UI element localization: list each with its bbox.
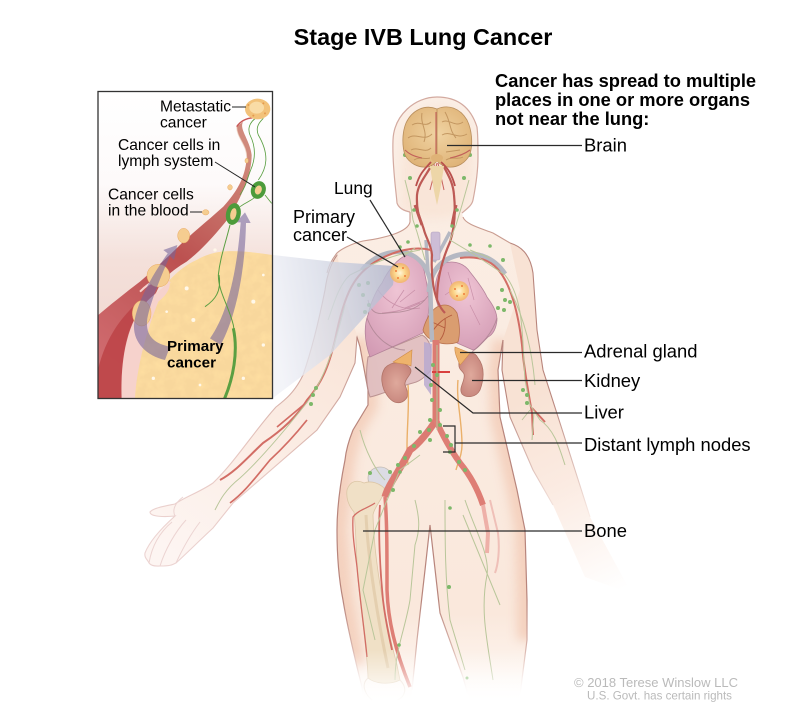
body labels: Bone (584, 520, 627, 541)
ureters (407, 380, 462, 470)
body labels (293, 134, 751, 541)
inset border (98, 92, 272, 398)
inset: lymph nodes (226, 181, 266, 225)
figure: left arm and hand (145, 248, 370, 566)
body labels: Kidney (584, 370, 641, 391)
inset: blood vessel (98, 118, 253, 400)
figure: head, torso and legs (327, 97, 527, 706)
human figure (145, 97, 632, 711)
figure: right arm (495, 238, 632, 594)
inset: labels: Cancer cells in (118, 137, 220, 154)
copyright: U.S. Govt. has certain rights (587, 690, 732, 702)
body labels: Primary (293, 207, 355, 227)
figure: right arm outline (502, 243, 590, 517)
callout: spread description: Cancer has spread to multiple (495, 70, 756, 91)
inset: labels: lymph system (118, 153, 213, 170)
callout: spread description (495, 70, 756, 129)
organ: liver (367, 335, 431, 397)
inset: cancer cells in vessel (132, 158, 248, 326)
vessels: arteries (220, 163, 545, 687)
inset panel: spread through blood and lymph (98, 92, 272, 400)
callout: spread description: places in one or more organs (495, 89, 750, 110)
organ: right kidney (459, 353, 483, 397)
inset: purple arrows (134, 212, 251, 360)
leader lines (347, 146, 582, 531)
inset: labels: cancer (167, 354, 216, 372)
organ: brain (403, 107, 472, 205)
inset: metastatic cancer (245, 99, 270, 119)
body labels: Adrenal gland (584, 340, 698, 362)
inset: labels: Metastatic (160, 98, 231, 116)
lymph vessels and nodes (215, 153, 565, 680)
copyright: © 2018 Terese Winslow LLC (574, 675, 738, 690)
vessel: central grey veins (362, 232, 505, 342)
copyright (574, 675, 738, 702)
bone: femur and hip (347, 467, 405, 700)
title: Stage IVB Lung Cancer (294, 24, 552, 50)
inset: lymph vessels (205, 117, 272, 400)
body labels: Brain (584, 134, 627, 156)
organ: adrenal glands (393, 347, 470, 366)
callout: spread description: not near the lung: (495, 108, 649, 129)
lung: pleura arcs (367, 296, 497, 352)
magnification funnel (273, 255, 395, 398)
organ: heart (423, 305, 459, 344)
organ: left kidney (382, 363, 411, 403)
body labels: Lung (334, 178, 373, 198)
vessels: trachea (431, 232, 440, 260)
inferior vena cava region (424, 342, 432, 395)
inset: labels: cancer (160, 114, 207, 132)
tumor: metastatic cancer in other lung (449, 281, 469, 301)
inset: labels: in the blood (108, 202, 189, 220)
body labels: Liver (584, 402, 624, 422)
inset: labels: Cancer cells (108, 186, 194, 204)
inset: leader lines (190, 107, 255, 212)
inset: tumor mass (134, 248, 272, 400)
body labels: Distant lymph nodes (584, 434, 751, 455)
inset: labels: Primary (167, 338, 224, 355)
body labels: cancer (293, 225, 347, 245)
organ: right-side lung (435, 262, 497, 350)
organ: left-side lung (365, 255, 429, 357)
leg fade (340, 650, 540, 711)
inset: labels (108, 98, 231, 372)
tumor: primary cancer in lung (390, 263, 410, 283)
